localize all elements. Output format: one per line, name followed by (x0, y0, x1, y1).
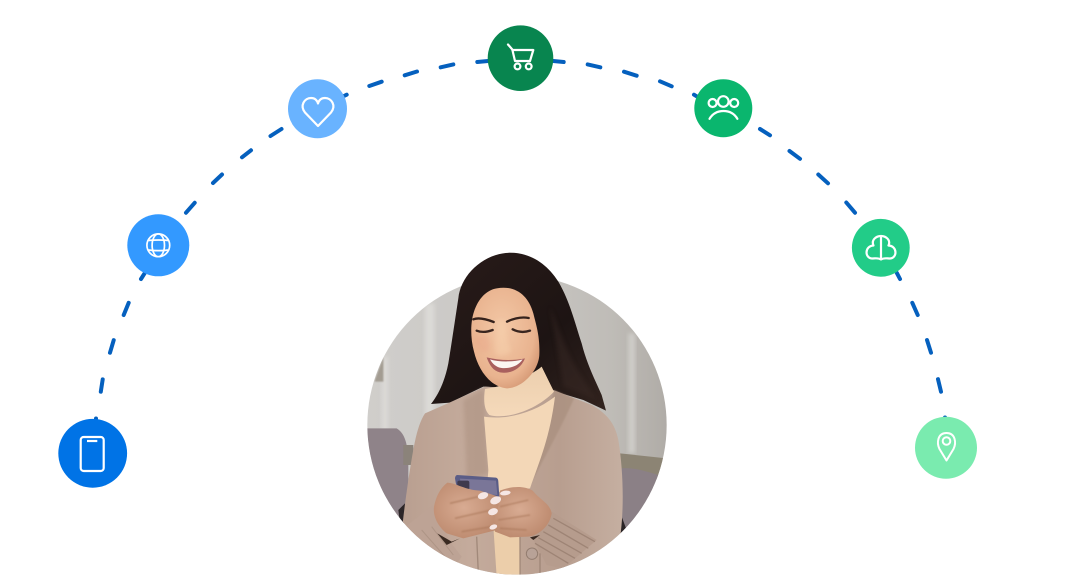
button (526, 548, 538, 559)
cardigan (402, 387, 627, 578)
cuff ribbing (406, 526, 458, 562)
eyes (477, 329, 530, 332)
smile (487, 357, 525, 373)
fingernails (477, 490, 511, 531)
dashed arc (96, 61, 945, 419)
icon: people (709, 96, 738, 119)
face (471, 288, 539, 388)
icon: phone (81, 437, 104, 471)
icon: pin (938, 433, 955, 460)
icon: heart (303, 98, 333, 126)
hair (431, 252, 606, 410)
node: shopping cart (488, 25, 553, 91)
node: cloud (852, 219, 910, 277)
node: mobile phone (58, 419, 127, 488)
node: location pin (915, 417, 977, 479)
icon: globe (147, 234, 170, 257)
icon: cloud (867, 236, 895, 260)
right hand (493, 487, 552, 537)
turtleneck (484, 397, 555, 493)
icon: cart (508, 44, 533, 69)
left hand (434, 483, 501, 538)
node: heart (288, 79, 347, 138)
phone (455, 475, 499, 497)
photo: woman smiling at phone (363, 247, 673, 578)
node: globe (127, 214, 189, 276)
node: people group (694, 79, 752, 137)
eyebrows (473, 318, 529, 322)
